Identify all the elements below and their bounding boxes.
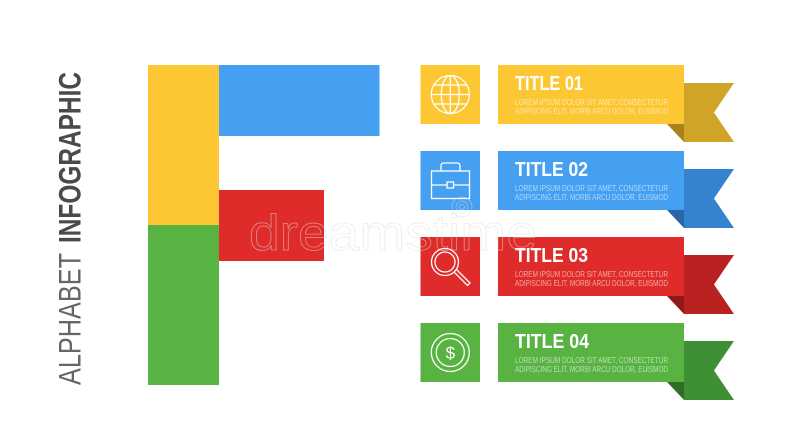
- banner: title 02: ADIPISCING ELIT. MORBI ARCU DOLOR, EUISMOD: [515, 193, 668, 202]
- banner: title 01: [498, 65, 734, 142]
- vertical title: [52, 72, 88, 385]
- banner: title 04: ADIPISCING ELIT. MORBI ARCU DOLOR, EUISMOD: [515, 365, 668, 374]
- banner: title 04: TITLE 04: [515, 331, 590, 353]
- banner: title 04: LOREM IPSUM DOLOR SIT AMET, CONSECTETUR: [515, 356, 668, 365]
- icon: dollar coin: $: [446, 344, 456, 362]
- icon: dollar coin: [420, 323, 480, 382]
- banner: title 02: LOREM IPSUM DOLOR SIT AMET, CONSECTETUR: [515, 184, 668, 193]
- banner: title 01: ADIPISCING ELIT. MORBI ARCU DOLOR, EUISMOD: [515, 107, 668, 116]
- letter F: [148, 65, 380, 385]
- watermark: dreamstime: [249, 205, 537, 261]
- banner: title 03: ADIPISCING ELIT. MORBI ARCU DOLOR, EUISMOD: [515, 279, 668, 288]
- icon: globe: [420, 65, 480, 124]
- banner: title 01: TITLE 01: [515, 73, 583, 95]
- banner: title 01: LOREM IPSUM DOLOR SIT AMET, CONSECTETUR: [515, 98, 668, 107]
- banner: title 03: TITLE 03: [515, 245, 588, 267]
- banner: title 02: TITLE 02: [515, 159, 588, 181]
- banner: title 04: [498, 323, 734, 400]
- vertical title: INFOGRAPHIC: [52, 72, 88, 243]
- banner: title 02: [498, 151, 734, 228]
- banner: title 03: [498, 237, 734, 314]
- banner: title 03: LOREM IPSUM DOLOR SIT AMET, CONSECTETUR: [515, 270, 668, 279]
- vertical title: ALPHABET: [52, 253, 88, 385]
- icon: magnifying glass: [420, 237, 480, 296]
- icon: briefcase: [420, 151, 480, 210]
